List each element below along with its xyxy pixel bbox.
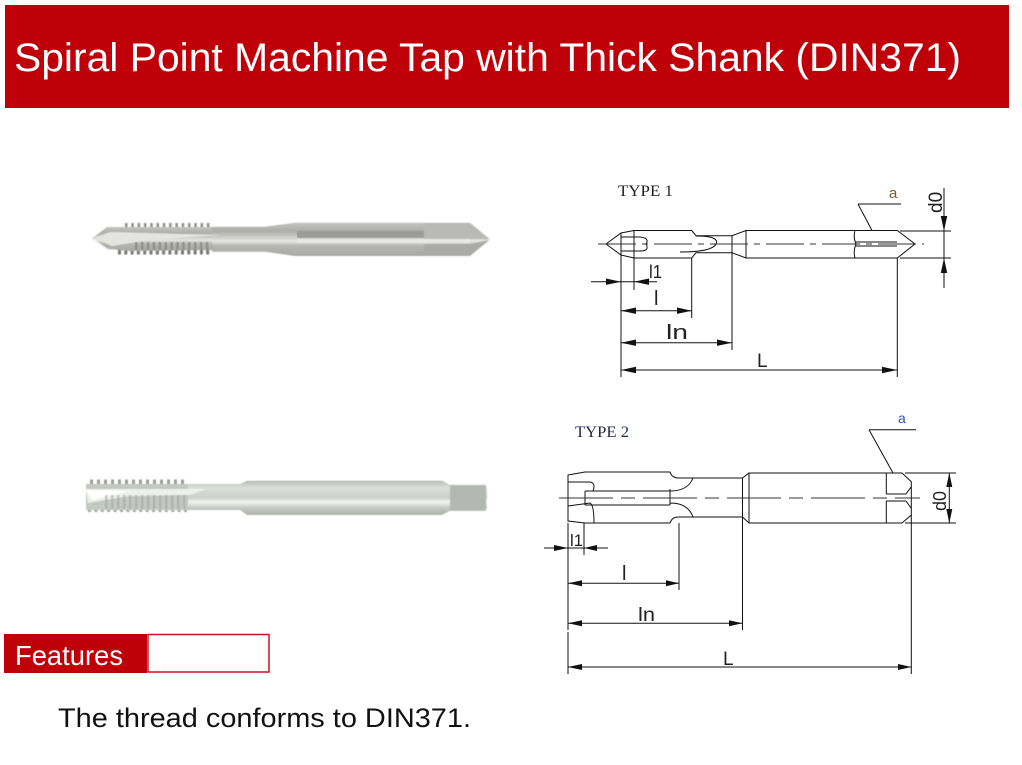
leader a type 2	[869, 410, 916, 473]
dimension d0 type 2: d0	[930, 491, 950, 511]
features text: The thread conforms to DIN371.	[58, 703, 471, 733]
features heading	[4, 634, 269, 673]
leader a type 2: a	[898, 410, 906, 426]
title banner	[5, 5, 1009, 108]
dimension l1 type 1	[591, 255, 662, 377]
dimension L type 1	[621, 258, 897, 377]
center line type 2	[559, 497, 920, 499]
label: type 2: TYPE 2	[575, 424, 629, 441]
title text: Spiral Point Machine Tap with Thick Shank (DIN371)	[14, 36, 961, 80]
dimension L type 2	[568, 515, 911, 674]
diagram: type 1	[591, 183, 951, 377]
dimension d0 type 1: d0	[926, 192, 947, 213]
center line type 1	[598, 243, 924, 245]
dimension L type 2: L	[723, 649, 734, 670]
features label: Features	[15, 640, 123, 671]
dimension ln type 1	[621, 253, 732, 350]
tap outline type 2	[568, 472, 956, 523]
label: type 1: TYPE 1	[618, 183, 673, 200]
dimension d0 type 1	[926, 188, 947, 288]
dimension l type 2: l	[622, 563, 626, 585]
leader a type 1	[858, 185, 901, 230]
dimension L type 1: L	[757, 351, 768, 372]
dimension d0 type 2	[930, 473, 952, 523]
dimension l1 type 1: l1	[649, 262, 662, 282]
photo: type 2 tap	[86, 481, 487, 515]
dimension ln type 1: ln	[666, 322, 688, 344]
dimension ln type 2: ln	[638, 605, 655, 626]
diagram: type 2	[544, 410, 956, 674]
photo: type 1 tap	[92, 223, 490, 256]
dimension ln type 2	[568, 517, 742, 630]
dimension l1 type 2: l1	[570, 531, 583, 550]
dimension l type 1: l	[654, 288, 658, 310]
dimension l type 2	[568, 523, 679, 590]
dimension l1 type 2	[544, 523, 608, 592]
dimension l type 1	[621, 258, 692, 318]
tap outline type 1	[598, 230, 951, 258]
leader a type 1: a	[889, 185, 898, 202]
